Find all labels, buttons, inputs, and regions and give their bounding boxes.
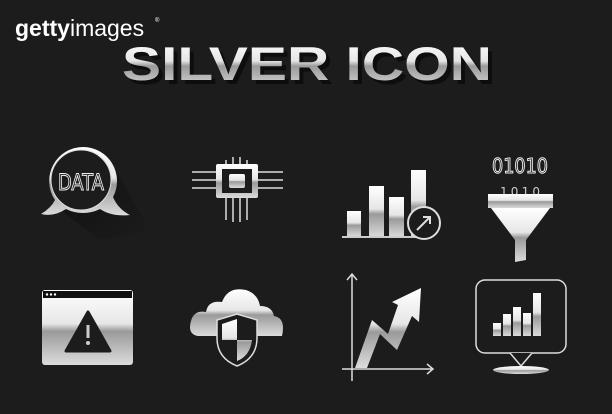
logo: gettyimages [15,15,144,41]
icon: DATA bubble [41,147,150,240]
title: SILVER ICON [126,41,496,94]
icon: funnel: 01010 [492,154,548,178]
icon: funnel [488,154,553,262]
logo: ® [155,17,160,24]
icon: bar chart with arrow [342,170,440,239]
icon: DATA bubble: DATA [58,171,104,196]
title: SILVER ICON [122,37,492,90]
icon: cloud shield [190,289,283,366]
icon: growth chart [342,274,433,381]
icon: chip [192,157,283,222]
icon: chart bubble [476,280,566,374]
icon: funnel: 1010 [500,185,540,199]
icon: browser warning [42,290,133,365]
